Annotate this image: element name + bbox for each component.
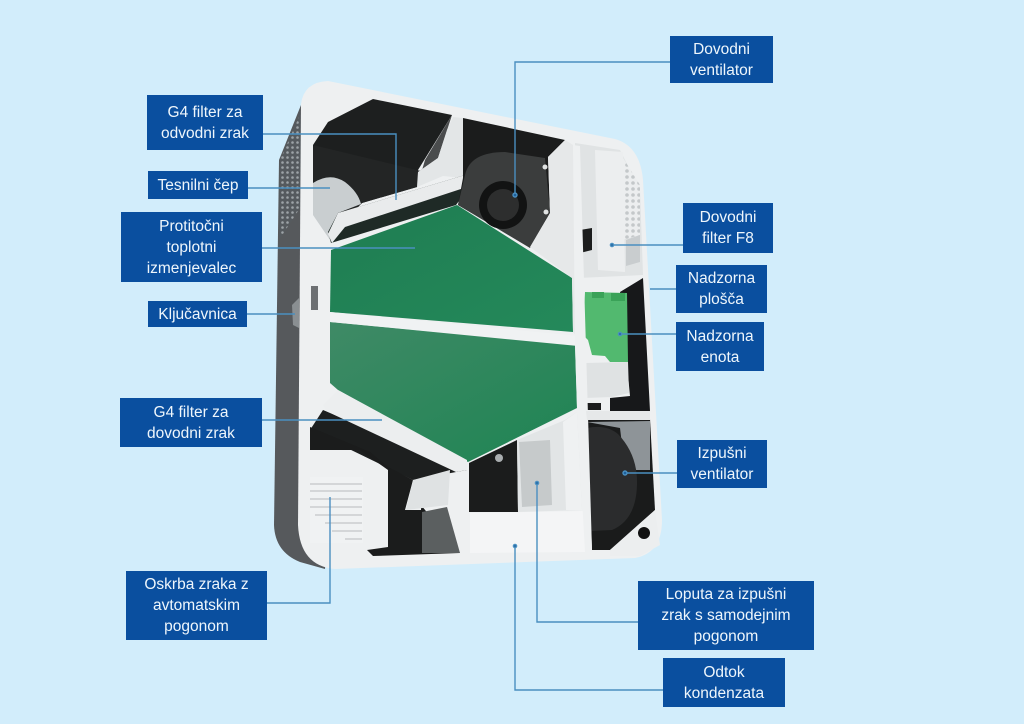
label: Dovodni ventilator xyxy=(670,36,773,83)
label: Ključavnica xyxy=(148,301,247,327)
unit front frame xyxy=(298,81,662,569)
label: Nadzorna enota xyxy=(676,322,764,371)
label: Nadzorna enota: enota xyxy=(701,348,739,366)
latch xyxy=(292,286,318,328)
label: G4 filter za odvodni zrak xyxy=(147,95,263,150)
drain hole xyxy=(610,510,660,556)
label: G4 filter za dovodni zrak xyxy=(120,398,262,447)
label: Nadzorna plošča xyxy=(676,265,767,313)
label: Oskrba zraka z avtomatskim pogonom xyxy=(126,571,267,640)
label: G4 filter za odvodni zrak: odvodni zrak xyxy=(161,124,249,142)
label: Oskrba zraka z avtomatskim pogonom: avtomatskim xyxy=(153,597,240,614)
supply fan cavity xyxy=(458,118,565,248)
label: Oskrba zraka z avtomatskim pogonom: Oskrba zraka z xyxy=(144,576,249,593)
label: Tesnilni čep: Tesnilni čep xyxy=(158,176,238,194)
label: Izpušni ventilator xyxy=(677,440,767,488)
label: Protitočni toplotni izmenjevalec: toplotni xyxy=(166,238,216,256)
label: Dovodni ventilator: ventilator xyxy=(690,62,753,78)
label: Ključavnica: Ključavnica xyxy=(158,306,237,322)
label: G4 filter za odvodni zrak: G4 filter za xyxy=(168,104,242,120)
label: Tesnilni čep xyxy=(148,171,248,199)
label: Dovodni ventilator: Dovodni xyxy=(693,40,750,58)
condensate drain panel xyxy=(470,511,585,553)
label: Nadzorna plošča: Nadzorna xyxy=(688,270,755,287)
white panel beside fan xyxy=(530,140,580,340)
upper left cavity xyxy=(313,99,452,225)
control compartment xyxy=(610,278,650,411)
label: G4 filter za dovodni zrak: dovodni zrak xyxy=(147,424,235,442)
label: Loputa za izpušni zrak s samodejnim pogonom: Loputa za izpušni xyxy=(666,586,786,603)
exhaust fan compartment xyxy=(586,419,655,550)
control board xyxy=(583,292,628,362)
label: Odtok kondenzata: Odtok xyxy=(703,664,745,680)
divider between exchanger halves xyxy=(330,312,578,346)
label: Loputa za izpušni zrak s samodejnim pogonom: zrak s samodejnim xyxy=(661,607,791,624)
label: Izpušni ventilator: Izpušni xyxy=(697,445,747,462)
upper G4 filter xyxy=(328,175,470,243)
label: Oskrba zraka z avtomatskim pogonom: pogonom xyxy=(164,618,229,635)
label: Loputa za izpušni zrak s samodejnim pogonom xyxy=(638,581,814,650)
louvre grille xyxy=(310,477,363,543)
lower heat exchanger xyxy=(330,322,577,462)
label: Nadzorna plošča: plošča xyxy=(699,291,744,308)
right frame strut xyxy=(573,145,592,552)
unit side wall xyxy=(274,100,340,569)
label: Dovodni filter F8: filter F8 xyxy=(702,230,754,247)
lower bypass flap xyxy=(469,412,582,512)
label: Nadzorna enota: Nadzorna xyxy=(686,328,754,344)
leader lines xyxy=(247,62,683,690)
lower G4 filter xyxy=(310,390,467,480)
label: G4 filter za dovodni zrak: G4 filter za xyxy=(154,404,228,420)
exhaust compartment shelf xyxy=(586,411,650,420)
label: Dovodni filter F8: Dovodni xyxy=(700,209,756,226)
label: Loputa za izpušni zrak s samodejnim pogonom: pogonom xyxy=(694,628,758,645)
label: Protitočni toplotni izmenjevalec: Protitočni xyxy=(159,218,224,234)
sealing plug xyxy=(313,177,361,240)
label: Izpušni ventilator: ventilator xyxy=(691,466,753,483)
supply filter F8 xyxy=(575,143,643,278)
centre strut xyxy=(417,117,463,187)
lower left cavity xyxy=(310,427,460,556)
label: Dovodni filter F8 xyxy=(683,203,773,253)
label: Odtok kondenzata xyxy=(663,658,785,707)
label: Protitočni toplotni izmenjevalec: izmenjevalec xyxy=(147,260,236,276)
upper heat exchanger xyxy=(330,205,573,332)
label: Odtok kondenzata: kondenzata xyxy=(684,684,764,702)
label: Protitočni toplotni izmenjevalec xyxy=(121,212,262,282)
terminal block xyxy=(585,362,629,410)
